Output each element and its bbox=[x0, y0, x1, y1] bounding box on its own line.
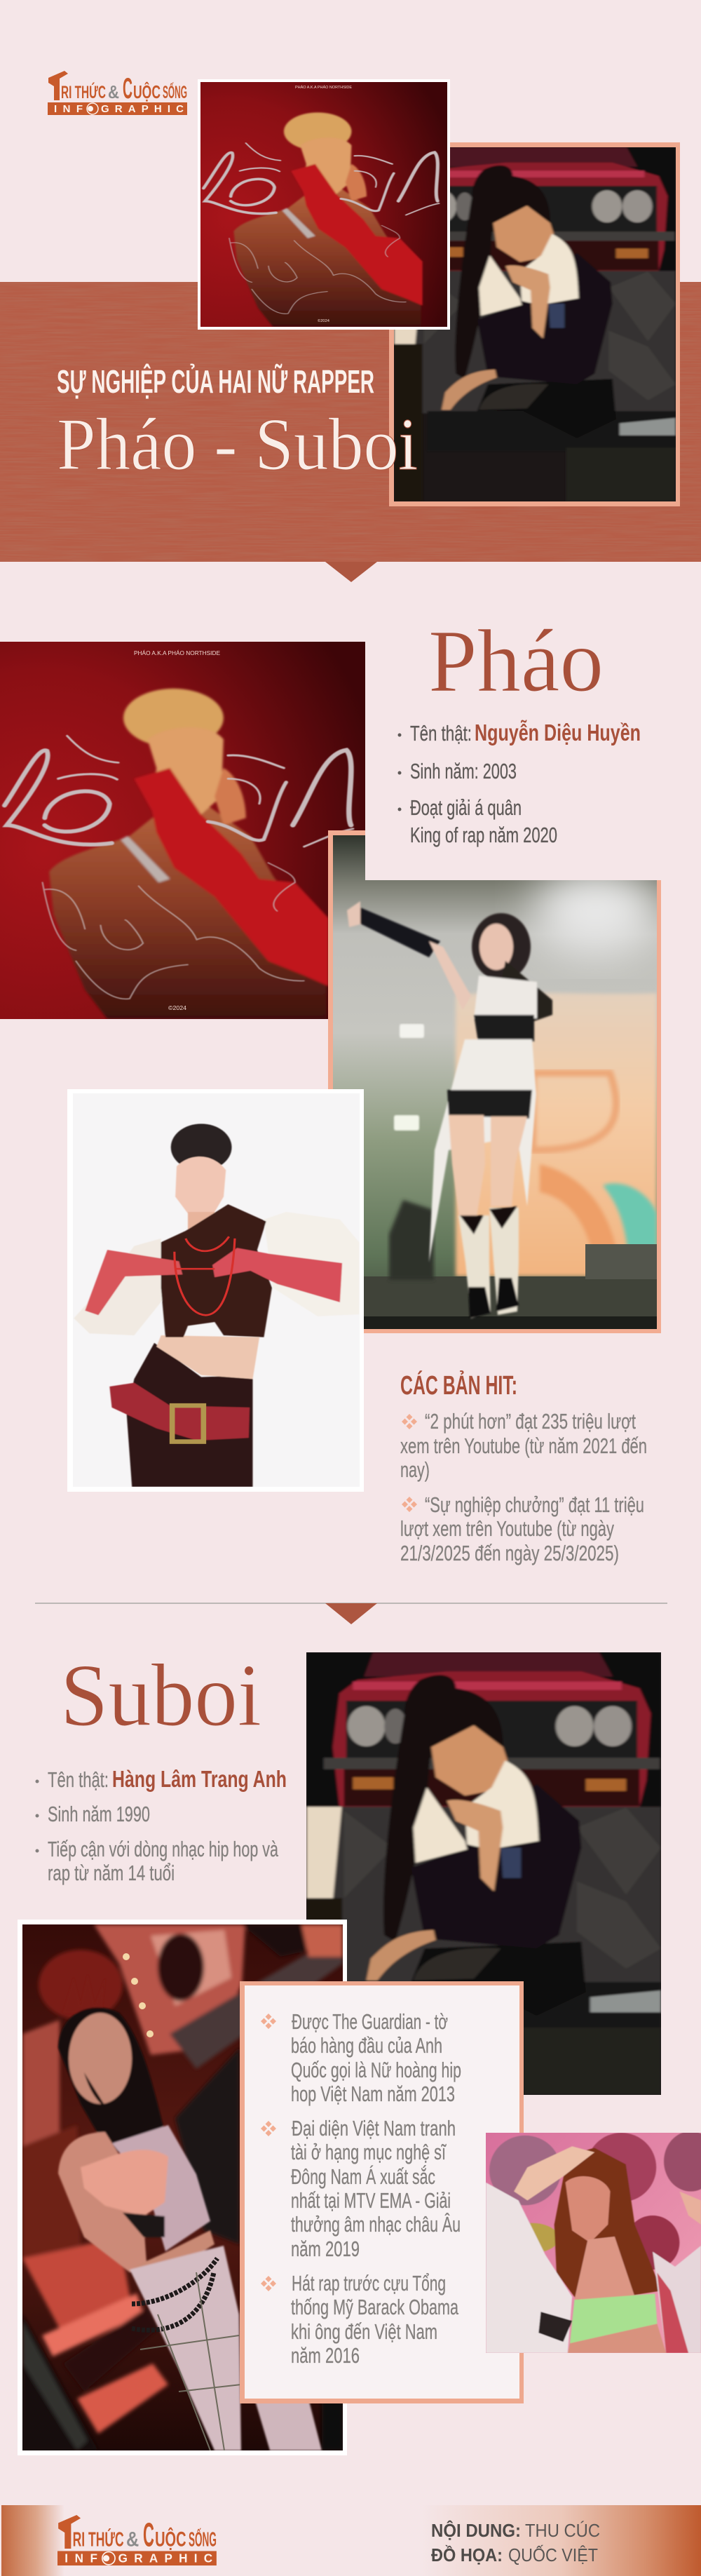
hit songs list: 21/3/2025 đến ngày 25/3/2025) bbox=[400, 1541, 619, 1565]
heading: Suboi: Suboi bbox=[60, 1647, 261, 1745]
heading: Pháo: Pháo bbox=[428, 612, 604, 710]
logo: Tri Thức & Cuộc Sống Infographic: INF bbox=[54, 103, 83, 115]
credits: THU CÚC bbox=[525, 2520, 600, 2541]
footer logo: UỘC bbox=[155, 2528, 186, 2551]
header band with textured background bbox=[0, 282, 701, 582]
photo: Pháo album cover large bbox=[0, 642, 365, 1019]
logo: Tri Thức & Cuộc Sống Infographic: GRAPHIC bbox=[101, 103, 184, 115]
logo: Tri Thức & Cuộc Sống Infographic: & bbox=[108, 81, 119, 102]
photo: Pháo portrait with white frame bbox=[67, 1089, 364, 1492]
photo: Pháo on stage with salmon frame bbox=[328, 830, 661, 1333]
credits: ĐỒ HỌA: bbox=[431, 2544, 503, 2565]
panel: Suboi achievements: tài ở hạng mục nghệ sĩ bbox=[291, 2140, 447, 2164]
photo: Pháo album cover with white frame bbox=[198, 79, 450, 330]
icon: diamond bullet bbox=[261, 2276, 276, 2291]
logo: Tri Thức & Cuộc Sống Infographic: UỘC bbox=[133, 81, 161, 102]
panel: Suboi achievements: năm 2016 bbox=[291, 2343, 360, 2368]
icon: diamond bullet bbox=[261, 2121, 276, 2136]
credits bbox=[431, 2520, 600, 2565]
footer logo: & bbox=[126, 2528, 139, 2551]
title bbox=[57, 363, 418, 485]
title line 1: SỰ NGHIỆP CỦA HAI NỮ RAPPER bbox=[57, 363, 374, 400]
Pháo facts list: Đoạt giải á quân bbox=[410, 795, 522, 820]
section divider with arrow bbox=[35, 1603, 667, 1624]
panel: Suboi achievements: Quốc gọi là Nữ hoàng hip bbox=[291, 2058, 461, 2082]
down-pointing notch bbox=[325, 562, 377, 582]
panel: Suboi achievements: Đại diện Việt Nam tranh bbox=[292, 2116, 456, 2140]
hit songs list: lượt xem trên Youtube (từ ngày bbox=[400, 1516, 614, 1541]
panel: Suboi achievements: nhất tại MTV EMA - Giải bbox=[291, 2188, 451, 2213]
Suboi facts list: Sinh năm 1990 bbox=[48, 1802, 150, 1826]
footer logo bbox=[57, 2515, 217, 2565]
title line 2: Pháo - Suboi bbox=[57, 403, 418, 485]
Suboi facts list: rap từ năm 14 tuổi bbox=[48, 1861, 175, 1885]
footer logo: RI THỨC bbox=[73, 2529, 124, 2551]
Pháo facts list: Nguyễn Diệu Huyền bbox=[475, 720, 641, 746]
footer logo: C bbox=[143, 2517, 154, 2554]
text: SỐNG bbox=[163, 81, 187, 102]
panel: Suboi achievements: khi ông đến Việt Nam bbox=[291, 2319, 437, 2344]
Suboi facts list: Tên thật: bbox=[48, 1767, 109, 1792]
panel: Suboi achievements: năm 2019 bbox=[291, 2237, 360, 2261]
hit songs list: nay) bbox=[400, 1457, 430, 1482]
panel: Suboi achievements: Đông Nam Á xuất sắc bbox=[291, 2164, 435, 2189]
logo: Tri Thức & Cuộc Sống Infographic bbox=[48, 71, 187, 115]
panel: Suboi achievements: thưởng âm nhạc châu Âu bbox=[291, 2212, 461, 2237]
Suboi facts list: Hàng Lâm Trang Anh bbox=[112, 1766, 287, 1792]
footer logo: INF bbox=[64, 2551, 97, 2565]
pink cover above stage photo bbox=[365, 828, 701, 880]
panel: Suboi achievements bbox=[240, 1981, 524, 2403]
photo: Suboi with CDs bbox=[486, 2133, 701, 2353]
hit songs list bbox=[400, 1370, 647, 1565]
Pháo facts list: Tên thật: bbox=[410, 721, 472, 746]
Suboi facts list: Tiếp cận với dòng nhạc hip hop và bbox=[48, 1837, 279, 1861]
photo: Pháo album cover large: ©2024 bbox=[168, 1004, 186, 1011]
credits: NỘI DUNG: bbox=[431, 2520, 521, 2541]
footer logo: GRAPHIC bbox=[118, 2551, 212, 2565]
footer band: SỐNG bbox=[189, 2528, 217, 2551]
Suboi facts list bbox=[35, 1766, 287, 1885]
hit songs heading: CÁC BẢN HIT: bbox=[400, 1370, 517, 1401]
panel: Suboi achievements: thống Mỹ Barack Obama bbox=[291, 2295, 459, 2319]
logo: Tri Thức & Cuộc Sống Infographic: RI THỨC bbox=[61, 81, 106, 102]
panel: Suboi achievements: hop Việt Nam năm 2013 bbox=[291, 2082, 455, 2106]
icon: diamond bullet bbox=[402, 1497, 417, 1512]
photo: Pháo album cover with white frame: ©2024 bbox=[318, 318, 329, 323]
panel: Suboi achievements: báo hàng đầu của Anh bbox=[291, 2033, 442, 2058]
panel: Suboi achievements: Hát rap trước cựu Tổng bbox=[292, 2271, 446, 2295]
Pháo facts list: Sinh năm: 2003 bbox=[410, 759, 517, 783]
credits: QUỐC VIỆT bbox=[508, 2544, 598, 2565]
Pháo facts list: King of rap năm 2020 bbox=[410, 823, 557, 847]
icon: diamond bullet bbox=[261, 2014, 276, 2029]
Pháo facts list bbox=[398, 720, 641, 847]
panel: Suboi achievements: Được The Guardian - tờ bbox=[292, 2009, 448, 2034]
photo: Pháo album cover with white frame: PHÁO A.K.A PHÁO NORTHSIDE bbox=[295, 85, 352, 90]
logo: Tri Thức & Cuộc Sống Infographic: C bbox=[123, 72, 132, 104]
footer band bbox=[1, 2505, 701, 2576]
photo: Suboi with salmon frame bbox=[389, 142, 680, 506]
photo: Pháo album cover large: PHÁO A.K.A PHÁO NORTHSIDE bbox=[134, 649, 220, 656]
photo: Suboi on stage with white frame bbox=[18, 1920, 347, 2455]
icon: diamond bullet bbox=[402, 1414, 417, 1429]
photo: Suboi with car bbox=[306, 1652, 661, 2095]
